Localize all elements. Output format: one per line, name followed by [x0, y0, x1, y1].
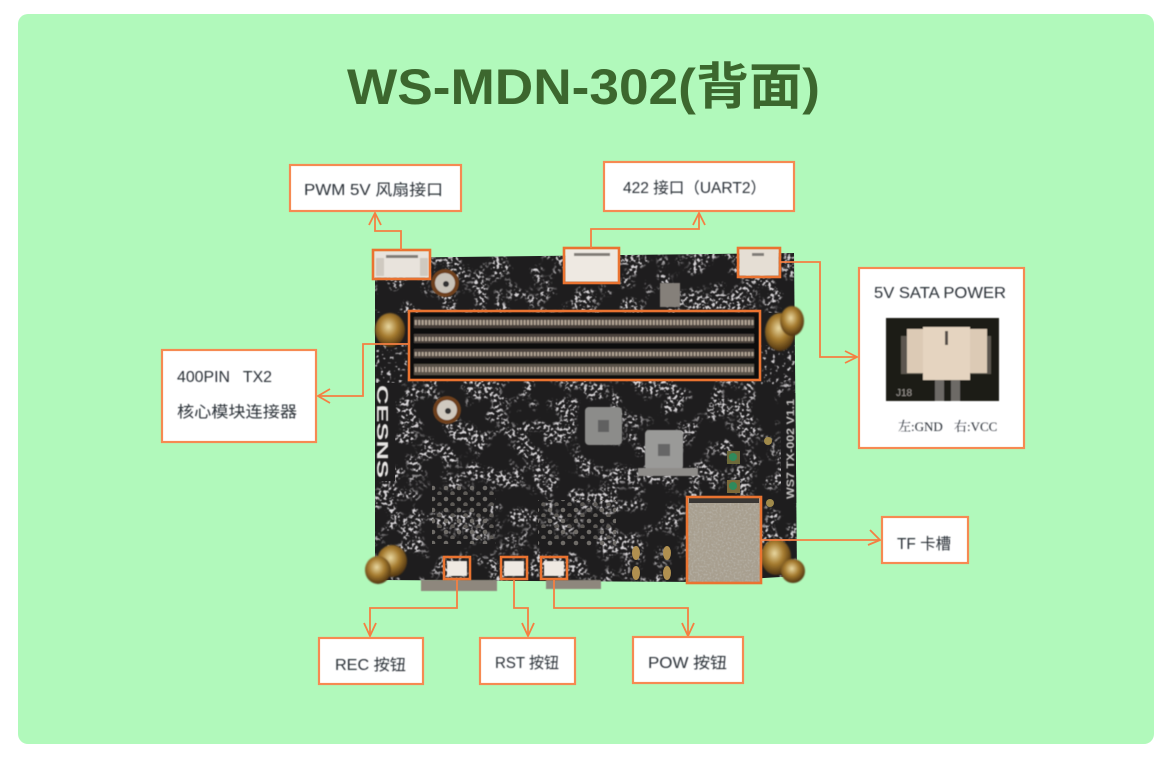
silk labels: CESNS [373, 385, 390, 479]
test points [632, 437, 774, 580]
label: RST button: RST 按钮 [495, 654, 559, 672]
tf card slot [688, 498, 761, 583]
connector: 400 pin [410, 313, 759, 379]
arrow: TF slot to label [761, 530, 880, 545]
highlight: REC button [444, 557, 470, 579]
label: POW button: POW 按钮 [648, 654, 727, 672]
label: PWM fan connector: PWM 5V 风扇接口 [304, 181, 443, 199]
arrow: RST button to label [514, 580, 534, 636]
circuit board photo [365, 249, 805, 591]
label: 400 pin TX2 connector: 400PIN TX2 [177, 369, 272, 386]
label: SATA power panel: 右:VCC [954, 419, 997, 434]
SATA heading: 5V SATA POWER [874, 285, 1006, 302]
arrow: POW button to label [554, 580, 694, 636]
arrow: 400 pin connector to label [318, 344, 408, 403]
arrow: REC button to label [364, 580, 457, 636]
label: POW button [633, 637, 743, 683]
board base [375, 253, 797, 582]
highlight: PWM connector [373, 250, 430, 279]
label: REC button: REC 按钮 [335, 656, 406, 674]
highlight: 422 connector [564, 248, 619, 283]
label: PWM fan connector [290, 165, 461, 211]
label: 400 pin TX2 connector [162, 350, 316, 442]
arrow: SATA connector to label [780, 262, 857, 363]
label: SATA power panel [859, 268, 1024, 448]
mounting holes [431, 269, 461, 424]
usb ports [421, 580, 601, 591]
inductors [585, 283, 698, 476]
standoffs on top of board [365, 306, 805, 584]
polarity note: 左:GND [898, 419, 943, 434]
arrow: 422 connector to label [591, 213, 705, 248]
highlight: 400 pin connector [409, 311, 760, 380]
highlight: TF slot [687, 497, 761, 583]
circuit board photo: WS7 TX-002 V1.1 [785, 399, 797, 499]
highlight: RST button [501, 557, 527, 579]
label: 422 UART2: 422 接口（UART2） [623, 179, 766, 197]
title: WS-MDN-302(背面) [347, 59, 820, 115]
highlight: SATA power connector [738, 248, 780, 277]
label: TF slot [882, 517, 968, 563]
white connectors [374, 249, 779, 576]
arrow: PWM connector to label [369, 213, 401, 250]
label: 400 pin TX2 connector: 核心模块连接器 [177, 403, 298, 421]
label: 422 UART2 [604, 162, 794, 211]
connector photo [886, 318, 999, 401]
highlight: POW button [541, 557, 567, 579]
connector photo: J18 [896, 388, 913, 399]
label: RST button [480, 638, 575, 684]
label: TF slot: TF 卡槽 [897, 535, 951, 553]
label: REC button [319, 638, 423, 684]
